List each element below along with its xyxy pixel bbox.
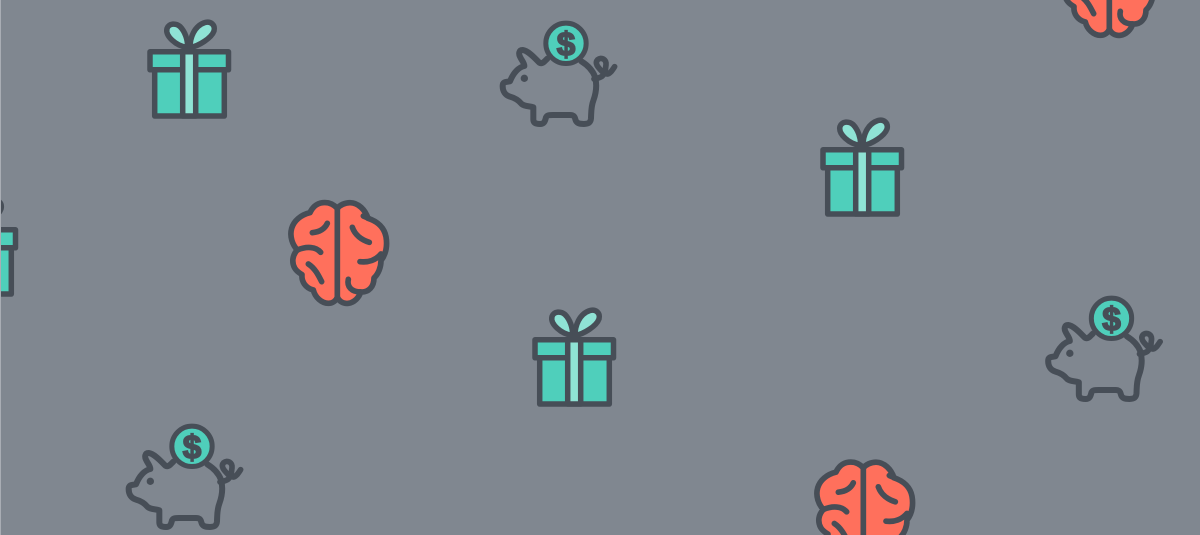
- icon: gift cropped at left edge: [0, 200, 16, 294]
- icon: piggy bank right: [1048, 298, 1160, 399]
- icon: brain center left: [291, 203, 387, 303]
- icon: piggy bank top: [503, 23, 615, 124]
- icon: piggy bank bottom left: [129, 426, 241, 527]
- icon: gift right: [823, 120, 902, 214]
- icon: brain cropped at top right: [1063, 0, 1159, 35]
- icon: gift center: [535, 310, 614, 404]
- icon: brain bottom: [817, 462, 913, 535]
- icon: gift top left: [150, 22, 228, 116]
